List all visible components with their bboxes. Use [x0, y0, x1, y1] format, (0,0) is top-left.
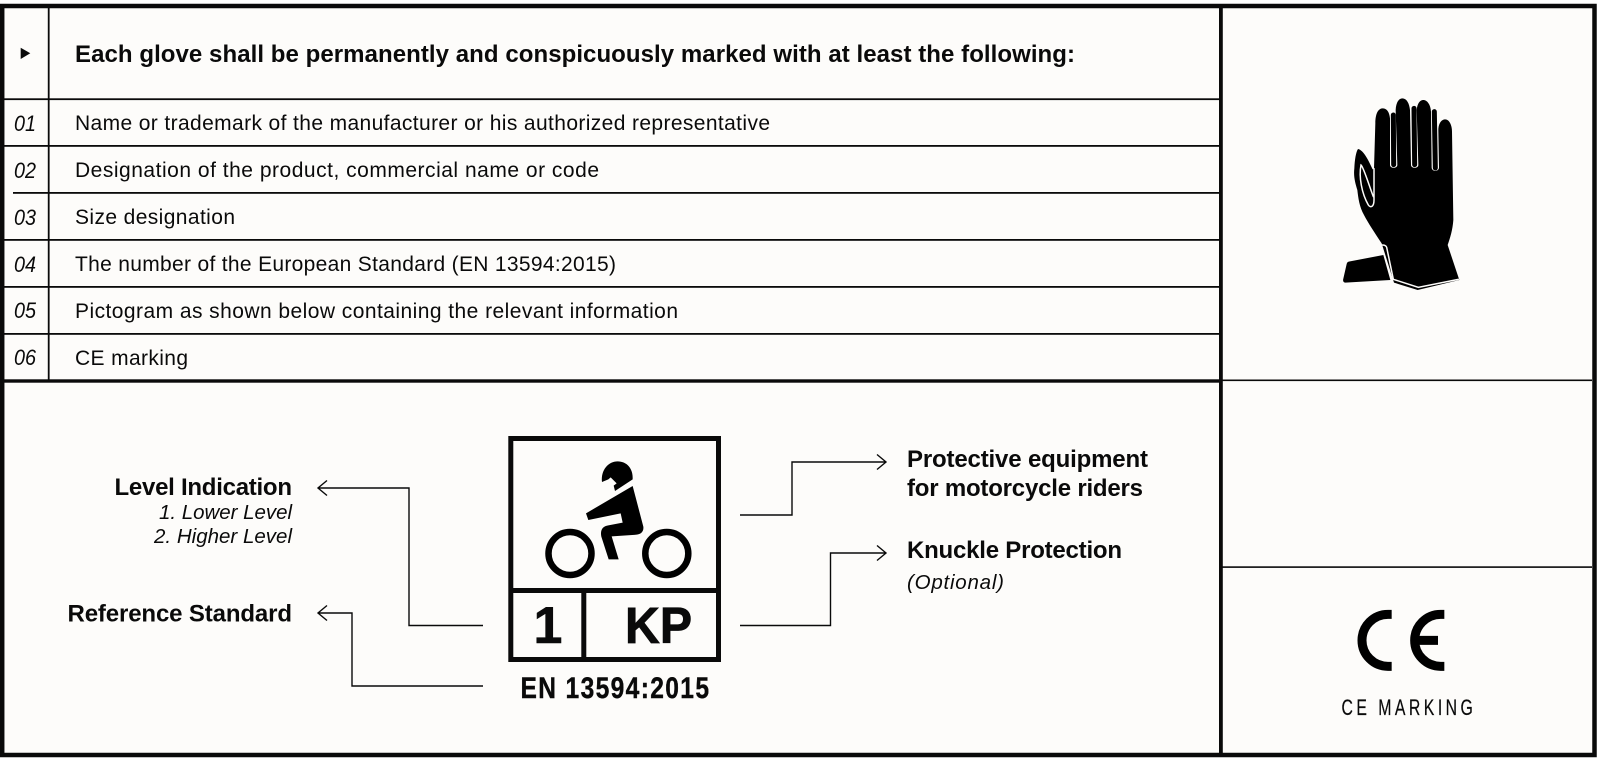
row 06: CE marking [75, 347, 188, 370]
arrow: to level indication [318, 480, 483, 626]
arrow: to knuckle protection [740, 546, 886, 626]
row 04: The number of the European Standard (EN 13594:2015) [75, 253, 616, 276]
row 01: 01 [14, 111, 36, 136]
row 03: Size designation [75, 206, 235, 229]
icon: motorcycle rider [548, 461, 688, 575]
row 02: 02 [14, 158, 36, 183]
row 06 [14, 345, 188, 370]
row 05: Pictogram as shown below containing the relevant information [75, 300, 678, 323]
row 04: 04 [14, 252, 36, 277]
callout: knuckle protection: (Optional) [907, 571, 1004, 594]
standard number: EN 13594:2015 [520, 671, 710, 705]
icon: heading triangle [21, 48, 30, 59]
KP code: KP [625, 597, 692, 654]
panel: right column dividers [1222, 380, 1592, 568]
callout: level indication [114, 474, 293, 548]
callout: knuckle protection: Knuckle Protection [907, 537, 1122, 564]
callout: knuckle protection [907, 537, 1122, 594]
icon: CE mark [1362, 614, 1444, 666]
callout: protective equipment: Protective equipment [907, 446, 1148, 473]
callout: protective equipment [907, 446, 1148, 502]
callout: level indication: 2. Higher Level [153, 525, 293, 548]
row 01: Name or trademark of the manufacturer or his authorized representative [75, 112, 770, 135]
arrow: to protective equipment [740, 454, 886, 515]
icon: glove [1343, 98, 1459, 290]
callout: reference standard: Reference Standard [68, 600, 292, 628]
row 03 [14, 205, 235, 230]
CE marking caption: CE MARKING [1342, 697, 1476, 721]
arrow: to reference standard [318, 606, 483, 686]
pictogram [510, 438, 718, 705]
callout: level indication: Level Indication [114, 474, 292, 501]
callout: level indication: 1. Lower Level [159, 501, 293, 524]
level digit: 1 [534, 597, 562, 655]
callout: protective equipment: for motorcycle riders [907, 475, 1143, 502]
row 06: 06 [14, 345, 36, 370]
row 02: Designation of the product, commercial name or code [75, 159, 599, 182]
panel: marking list table [4, 8, 1219, 383]
heading: Each glove shall be permanently and conspicuously marked with at least the following: [75, 41, 1075, 68]
row 05: 05 [14, 298, 36, 323]
row 03: 03 [14, 205, 36, 230]
